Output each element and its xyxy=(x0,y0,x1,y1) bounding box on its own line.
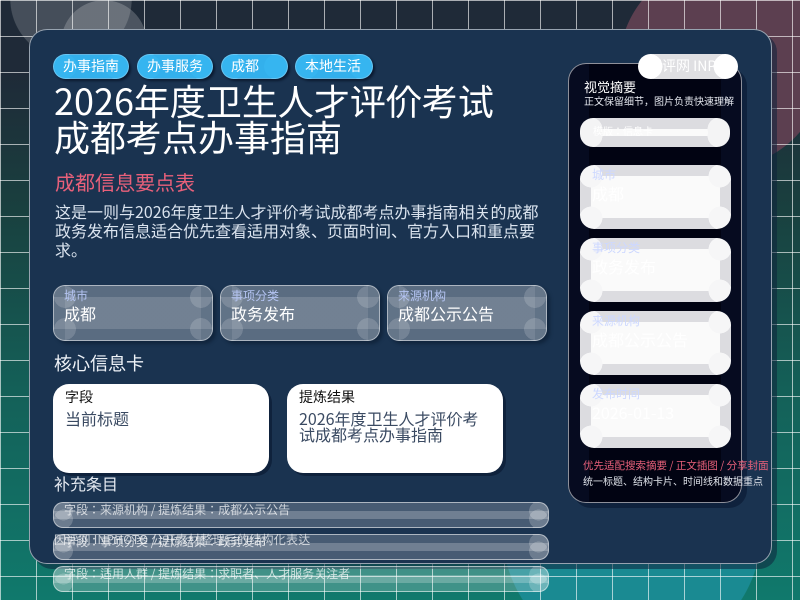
info card: 字段: 当前标题 xyxy=(65,406,129,430)
stat chip: 城市 xyxy=(53,285,213,341)
panel box: 城市: 成都 xyxy=(592,181,624,205)
stat chip: 来源机构 xyxy=(387,285,547,341)
stat chip: 城市: 成都 xyxy=(64,301,96,325)
heading: 核心信息卡: 核心信息卡 xyxy=(54,350,144,376)
panel box: 城市 xyxy=(580,165,731,229)
tag: 办事指南 xyxy=(53,54,129,79)
title: 成都考点办事指南 xyxy=(54,110,342,162)
title xyxy=(54,74,494,162)
panel box: 模版 xyxy=(580,118,730,147)
panel box: 事项分类: 政务发布 xyxy=(592,254,656,278)
stat chip: 城市: 城市 xyxy=(64,287,88,304)
stat chip: 事项分类: 事项分类 xyxy=(231,287,279,304)
source credit: 因评网 INPHOTO 公开素材整理后的结构化表达 xyxy=(54,531,310,548)
list row: 事项分类: 字段：事项分类 / 提炼结果：政务发布 xyxy=(64,533,266,550)
list row: 事项分类 xyxy=(53,534,549,560)
tag: 本地生活: 本地生活 xyxy=(305,56,361,76)
info card: 提炼结果: 提炼结果 xyxy=(299,387,355,407)
tag: 成都: 成都 xyxy=(231,56,259,76)
panel box: 来源机构 xyxy=(580,311,731,375)
panel sub text: 正文保留细节，图片负责快速理解 xyxy=(584,93,734,108)
stat chip: 来源机构: 来源机构 xyxy=(398,287,446,304)
list row: 来源机构 xyxy=(53,502,549,528)
side panel: visual summary xyxy=(568,63,742,503)
panel box: 城市: 城市 xyxy=(592,166,616,183)
panel box: 来源机构: 成都公示公告 xyxy=(592,327,688,351)
heading: 补充条目: 补充条目 xyxy=(54,471,118,495)
list row: 适用人群: 字段：适用人群 / 提炼结果：求职者、人才服务关注者 xyxy=(64,565,350,582)
tag: 办事服务: 办事服务 xyxy=(147,56,203,76)
info card: 提炼结果: 试成都考点办事指南 xyxy=(299,422,443,446)
panel box: 事项分类 xyxy=(580,238,731,302)
panel note: pink: 优先适配搜索摘要 / 正文插图 / 分享封面 xyxy=(583,458,769,473)
panel box: 发布时间: 2026-01-13 xyxy=(592,400,674,424)
intro paragraph xyxy=(55,199,539,261)
panel box: 事项分类: 事项分类 xyxy=(592,239,640,256)
panel box: 模版: 模版：信息卡 xyxy=(593,123,653,138)
panel box: 发布时间: 发布时间 xyxy=(592,385,640,402)
tag: 办事指南: 办事指南 xyxy=(63,56,119,76)
tag: 办事服务 xyxy=(137,54,213,79)
info card: 提炼结果 xyxy=(287,384,503,473)
intro paragraph: 这是一则与2026年度卫生人才评价考试成都考点办事指南相关的成都 xyxy=(55,199,539,223)
title: 2026年度卫生人才评价考试 xyxy=(54,74,494,126)
info card: 提炼结果: 2026年度卫生人才评价考 xyxy=(299,406,479,430)
list row: 适用人群 xyxy=(53,566,549,592)
panel note: white: 统一标题、结构卡片、时间线和数据重点 xyxy=(583,473,763,488)
panel heading: 视觉摘要 xyxy=(584,77,636,96)
info card: 字段: 字段 xyxy=(65,387,93,407)
stat chip: 事项分类 xyxy=(220,285,380,341)
panel box: 发布时间 xyxy=(580,384,731,448)
tag: 本地生活 xyxy=(295,54,373,79)
tag: 成都 xyxy=(221,54,288,79)
list row: 来源机构: 字段：来源机构 / 提炼结果：成都公示公告 xyxy=(64,501,290,518)
panel box: 来源机构: 来源机构 xyxy=(592,312,640,329)
stat chip: 事项分类: 政务发布 xyxy=(231,301,295,325)
intro paragraph: 政务发布信息适合优先查看适用对象、页面时间、官方入口和重点要 xyxy=(55,218,535,242)
subtitle: 成都信息要点表 xyxy=(55,167,195,196)
info card: 字段 xyxy=(53,384,269,473)
stat chip: 来源机构: 成都公示公告 xyxy=(398,301,494,325)
intro paragraph: 求。 xyxy=(55,237,87,261)
